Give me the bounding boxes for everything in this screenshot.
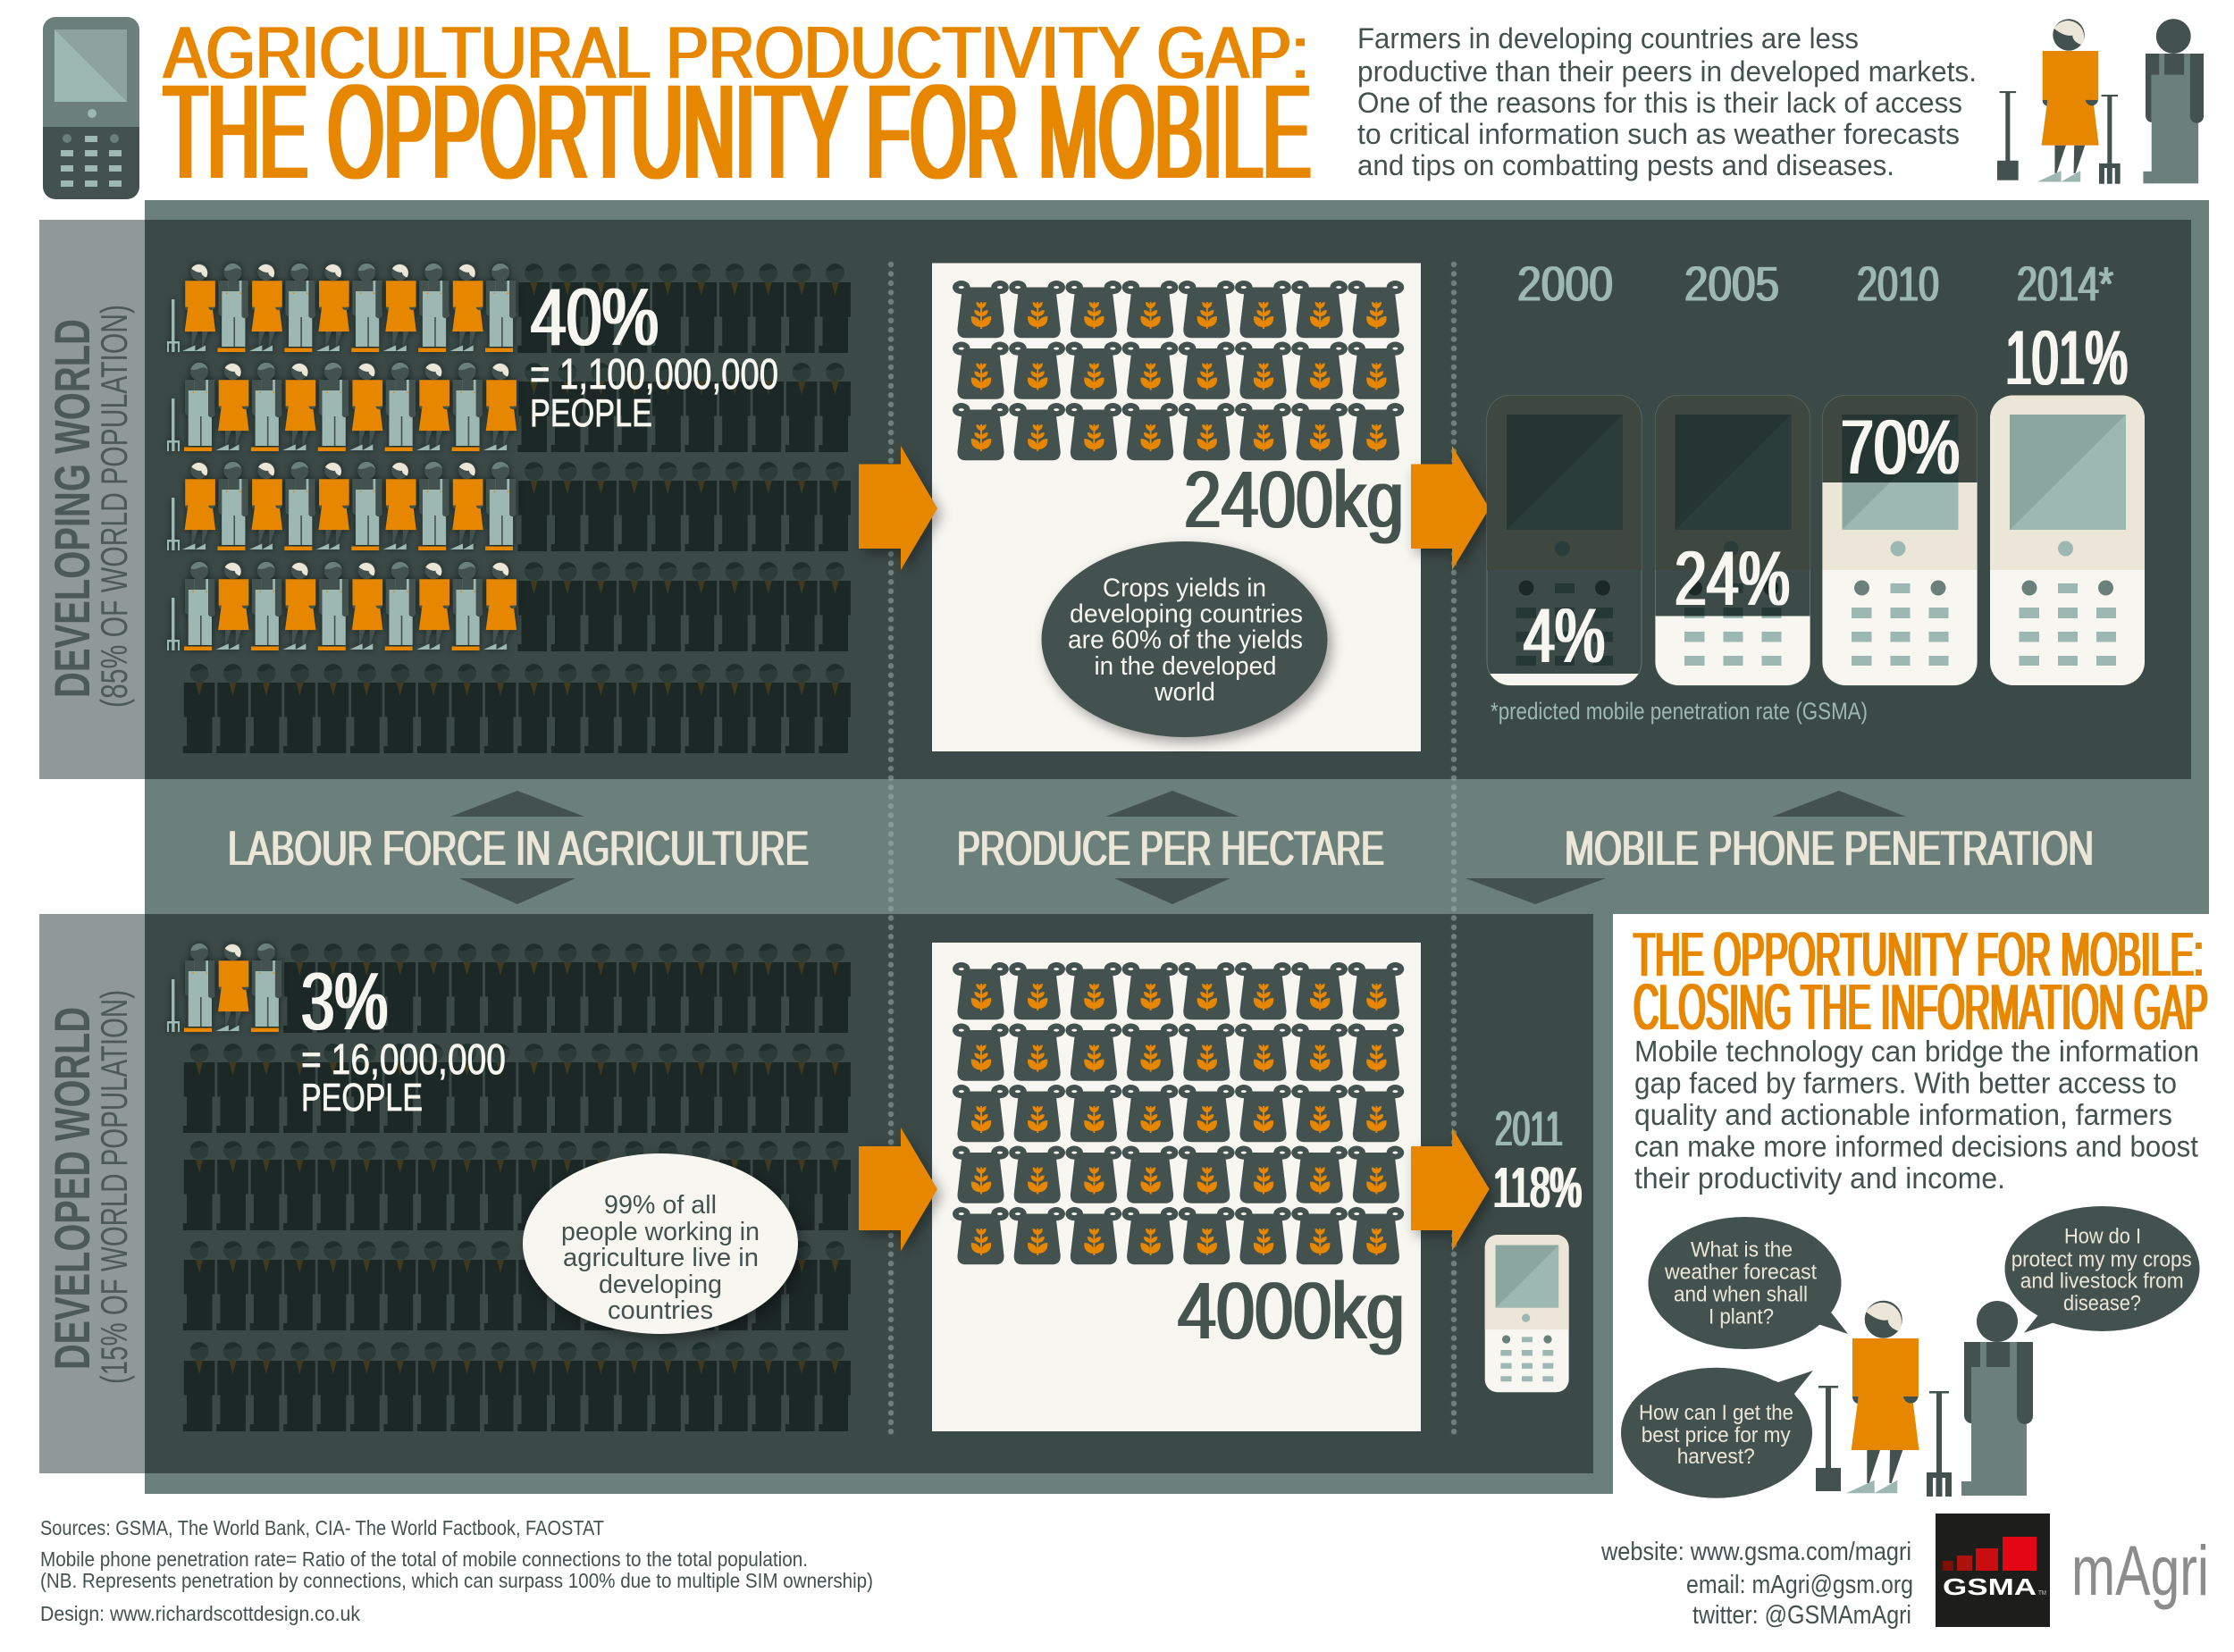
speech bubble: crop disease: disease?	[2063, 1292, 2141, 1316]
intro text	[1357, 22, 1977, 181]
callout: crop yields: world	[1154, 678, 1215, 707]
callout: crop yields: are 60% of the yields	[1068, 625, 1303, 654]
stat: 40% of labour	[530, 273, 778, 435]
sidebar label: developed world: (15% OF WORLD POPULATION)	[93, 990, 135, 1384]
footnote: predicted penetration: *predicted mobile penetration rate (GSMA)	[1491, 698, 1868, 725]
arrow: produce to mobile, developing	[1411, 446, 1490, 570]
stat: 4000kg: 4000kg	[1178, 1267, 1405, 1356]
body text: mobile opportunity: gap faced by farmers. With better access to	[1634, 1067, 2177, 1099]
icon: header phone	[43, 17, 139, 199]
chart: phone 2005, 24%	[1655, 395, 1810, 685]
phone percentages: 24%	[1675, 536, 1790, 622]
sidebar label: developed world	[44, 990, 135, 1384]
intro text: to critical information such as weather forecasts	[1357, 118, 1960, 150]
speech bubble: crop disease: protect my my crops	[2011, 1247, 2192, 1271]
year labels	[1517, 256, 2113, 311]
logo: GSMA: GSMA	[1943, 1573, 2037, 1600]
stat: 3% of labour	[301, 957, 506, 1120]
speech bubble: price for harvest: best price for my	[1642, 1423, 1791, 1447]
year label 2011: 2011	[1495, 1101, 1563, 1156]
speech bubble: crop disease: and livestock from	[2020, 1270, 2184, 1294]
band markers: triangles	[450, 791, 1906, 904]
contact details: website: www.gsma.com/magri	[1600, 1538, 1911, 1566]
sidebar label: developed world: DEVELOPED WORLD	[44, 1007, 100, 1370]
intro text: One of the reasons for this is their lack of access	[1357, 87, 1962, 119]
arrow: produce to mobile, developed	[1411, 1128, 1490, 1251]
intro text: Farmers in developing countries are less	[1357, 22, 1859, 55]
arrow: labour to produce, developing	[859, 446, 937, 570]
callout: crop yields: in the developed	[1094, 652, 1276, 681]
callout: 99% of agricultural workers: agriculture live in	[563, 1244, 759, 1272]
speech bubble: price for harvest: harvest?	[1677, 1445, 1755, 1469]
body text: mobile opportunity	[1634, 1035, 2199, 1195]
phone percentages	[1524, 315, 2128, 679]
stat: 3% of labour: = 16,000,000	[301, 1036, 506, 1084]
callout: 99% of agricultural workers	[523, 1153, 798, 1334]
phone percentages: 101%	[2005, 315, 2128, 401]
body text: mobile opportunity: their productivity and income.	[1634, 1161, 2005, 1195]
sidebar label: developing world	[44, 305, 135, 708]
callout: 99% of agricultural workers: people working in	[561, 1218, 760, 1246]
callout: crop yields: developing countries	[1070, 600, 1303, 629]
sidebar label: developing world: DEVELOPING WORLD	[44, 319, 100, 698]
title: AGRICULTURAL PRODUCTIVITY GAP:	[164, 11, 1309, 94]
panel: developed world	[145, 914, 1593, 1473]
year labels: 2010	[1857, 256, 1939, 311]
icon: header farmers with tools	[1997, 19, 2204, 184]
title: THE OPPORTUNITY FOR MOBILE	[164, 56, 1311, 206]
speech bubble: weather forecast: and when shall	[1674, 1283, 1808, 1307]
icon: farmers with tools	[1816, 1300, 2033, 1497]
phone percentages: 70%	[1841, 405, 1960, 491]
stat: 2400kg: 2400kg	[1184, 456, 1404, 545]
intro text: productive than their peers in developed markets.	[1357, 55, 1977, 88]
phone percentages: 4%	[1524, 593, 1605, 679]
stat: 3% of labour: PEOPLE	[301, 1076, 423, 1120]
chart: developing world labour force pictogram	[167, 264, 851, 753]
speech bubble: weather forecast: I plant?	[1709, 1305, 1774, 1329]
panel: developing world	[145, 220, 2191, 779]
callout: 99% of agricultural workers: 99% of all	[604, 1191, 717, 1220]
dotted column dividers	[891, 264, 1454, 1438]
stat: 118%: 118%	[1493, 1155, 1582, 1220]
body text: mobile opportunity: quality and actionable information, farmers	[1634, 1098, 2172, 1131]
panel: developing world produce card	[932, 263, 1421, 751]
mid-tone frame band	[145, 200, 2209, 1494]
sources and notes: Mobile phone penetration rate= Ratio of the total of mobile connections to the total population.	[40, 1547, 808, 1571]
speech bubble: weather forecast: weather forecast	[1664, 1261, 1817, 1285]
heading: closing the information gap	[1634, 919, 2208, 1044]
sources and notes: (NB. Represents penetration by connections, which can surpass 100% due to multiple SIM ownership)	[40, 1569, 873, 1592]
contact details: email: mAgri@gsm.org	[1686, 1571, 1913, 1599]
callout: 99% of agricultural workers: countries	[608, 1296, 713, 1325]
contact details: twitter: @GSMAmAgri	[1692, 1601, 1911, 1630]
year labels: 2014*	[2017, 256, 2113, 311]
band labels	[228, 820, 2094, 876]
sidebar label: developing world: (85% OF WORLD POPULATION)	[93, 305, 135, 708]
chart: developing world sacks	[953, 281, 1404, 460]
callout: crop yields: Crops yields in	[1103, 574, 1266, 602]
stat: 40% of labour: 40%	[531, 273, 659, 363]
chart: developed world sacks	[953, 962, 1404, 1264]
callout: 99% of agricultural workers: developing	[599, 1270, 722, 1299]
band labels: LABOUR FORCE IN AGRICULTURE	[228, 820, 809, 876]
title	[164, 11, 1311, 206]
logo: GSMA: TM	[2038, 1590, 2046, 1597]
speech bubble: weather forecast	[1648, 1217, 1848, 1349]
speech bubble: crop disease: How do I	[2064, 1225, 2141, 1249]
chart: phone 2010, 70%	[1823, 395, 1977, 685]
sources and notes: Design: www.richardscottdesign.co.uk	[40, 1602, 360, 1625]
sources and notes: Sources: GSMA, The World Bank, CIA- The World Factbook, FAOSTAT	[40, 1516, 604, 1539]
chart: developed world labour force pictogram	[167, 943, 851, 1431]
speech bubble: weather forecast: What is the	[1691, 1238, 1793, 1262]
panel: developing world sidebar	[39, 220, 145, 779]
logo: GSMA	[1936, 1514, 2050, 1627]
stat: 40% of labour: PEOPLE	[530, 391, 652, 435]
speech bubble: price for harvest	[1621, 1368, 1813, 1498]
year labels: 2000	[1517, 256, 1613, 311]
arrow: labour to produce, developed	[859, 1128, 937, 1251]
sources and notes	[40, 1516, 873, 1625]
panel: developed world produce card	[932, 943, 1421, 1431]
contact details	[1600, 1538, 1913, 1630]
stat: 40% of labour: = 1,100,000,000	[530, 351, 778, 398]
callout: crop yields	[1042, 541, 1328, 737]
intro text: and tips on combatting pests and diseases.	[1357, 149, 1894, 181]
stat: 3% of labour: 3%	[301, 957, 388, 1047]
chart: phone 2011	[1485, 1235, 1569, 1392]
band labels: PRODUCE PER HECTARE	[957, 820, 1384, 876]
speech bubble: crop disease	[2005, 1206, 2200, 1333]
year labels: 2005	[1684, 256, 1779, 311]
chart: phone 2014, 101%	[1990, 395, 2145, 685]
body text: mobile opportunity: can make more informed decisions and boost	[1634, 1129, 2198, 1163]
body text: mobile opportunity: Mobile technology can bridge the information	[1634, 1035, 2199, 1068]
panel: developed world sidebar	[39, 914, 145, 1473]
speech bubble: price for harvest: How can I get the	[1639, 1401, 1793, 1425]
chart: phone 2000, 4%	[1487, 395, 1642, 685]
